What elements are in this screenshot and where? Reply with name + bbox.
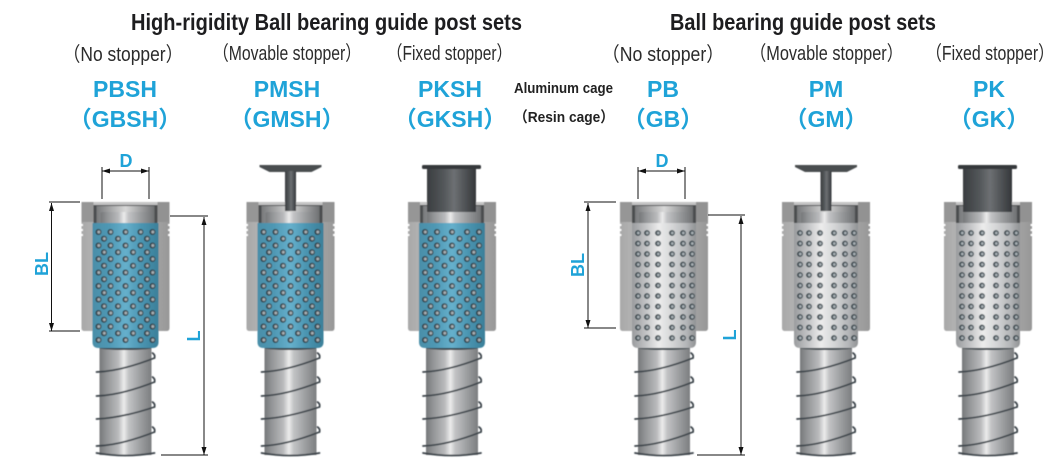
model code: GM: （GM） [784, 106, 868, 132]
post: PMSH blue cage, movable stopper [246, 165, 334, 456]
subtitle: no stopper 1: （No stopper） [63, 43, 183, 66]
dimension: BL left set [32, 202, 80, 331]
dimension: D left set [102, 151, 149, 199]
post: PB silver cage, no stopper [620, 202, 708, 456]
subtitle: movable stopper 1: （Movable stopper） [213, 42, 361, 65]
dimension: BL left set: BL [32, 252, 52, 276]
post: PBSH blue cage, no stopper [82, 202, 170, 456]
subtitle: no stopper 2: （No stopper） [602, 43, 724, 66]
row label: resin cage: （Resin cage） [514, 109, 614, 126]
model code: PBSH: PBSH [93, 76, 157, 102]
model code: PK: PK [973, 76, 1005, 102]
post: PKSH blue cage, fixed stopper [408, 165, 496, 456]
model code: GK: （GK） [949, 106, 1029, 132]
dimension: L left set: L [184, 330, 204, 342]
model code: PKSH: PKSH [418, 76, 482, 102]
dimension: D right set [638, 151, 685, 199]
post: PM silver cage, movable stopper [782, 165, 870, 456]
title: ball bearing sets: Ball bearing guide post sets [670, 9, 936, 35]
dimension: D right set: D [656, 151, 668, 171]
title: high-rigidity sets: High-rigidity Ball bearing guide post sets [131, 9, 522, 35]
subtitle: movable stopper 2: （Movable stopper） [750, 42, 903, 65]
dimension: L left set [161, 216, 208, 455]
model code: GKSH: （GKSH） [394, 106, 506, 132]
dimension: BL right set: BL [568, 253, 588, 277]
model code: PB: PB [647, 76, 679, 102]
row label: aluminum cage: Aluminum cage [514, 80, 613, 97]
model code: GMSH: （GMSH） [230, 106, 344, 132]
model code: PM: PM [809, 76, 843, 102]
model code: GBSH: （GBSH） [69, 106, 181, 132]
dimension: D left set: D [120, 151, 132, 171]
model code: PMSH: PMSH [254, 76, 320, 102]
dimension: BL right set [568, 202, 616, 328]
post: PK silver cage, fixed stopper [944, 165, 1032, 456]
dimension: L right set [697, 215, 745, 455]
subtitle: fixed stopper 1: （Fixed stopper） [387, 42, 512, 65]
model code: GB: （GB） [623, 106, 703, 132]
dimension: L right set: L [720, 330, 740, 340]
